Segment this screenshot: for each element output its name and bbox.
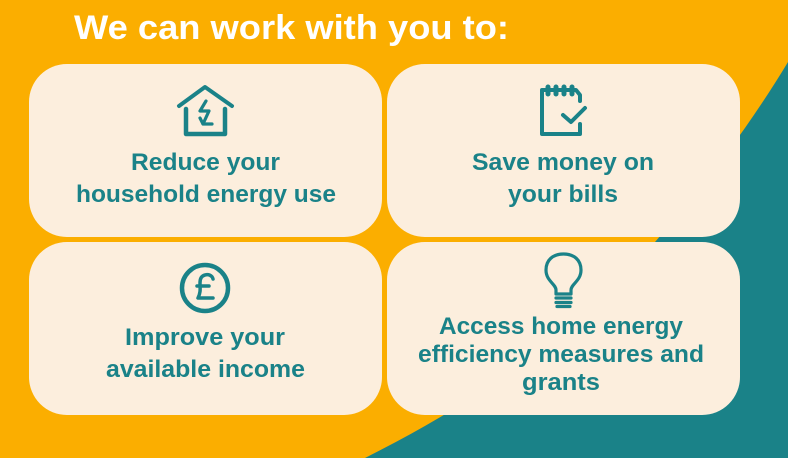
text: access home energy efficiency measures and grants: Access home energy: [439, 313, 683, 340]
text: improve your available income: Improve your: [125, 324, 285, 351]
icon: pound coin: [182, 265, 228, 311]
title: We can work with you to:: [74, 9, 509, 47]
text: reduce your household energy use: Reduce your: [131, 149, 280, 176]
panel: save money: [387, 64, 740, 237]
panel: home energy measures: [387, 242, 740, 415]
text: reduce your household energy use: household energy use: [76, 181, 336, 208]
panel: improve income: [29, 242, 382, 415]
panel: reduce energy use: [29, 64, 382, 237]
icon: house with lightning bolt: [179, 87, 232, 134]
text: improve your available income: available income: [106, 356, 305, 383]
text: access home energy efficiency measures and grants: efficiency measures and: [418, 341, 704, 368]
text: save money on your bills: your bills: [508, 181, 618, 208]
icon: notepad with tick: [542, 87, 585, 134]
teal corner shape: [365, 62, 788, 458]
icon: light bulb: [546, 254, 581, 306]
text: access home energy efficiency measures and grants: grants: [522, 369, 600, 396]
text: save money on your bills: Save money on: [472, 149, 654, 176]
